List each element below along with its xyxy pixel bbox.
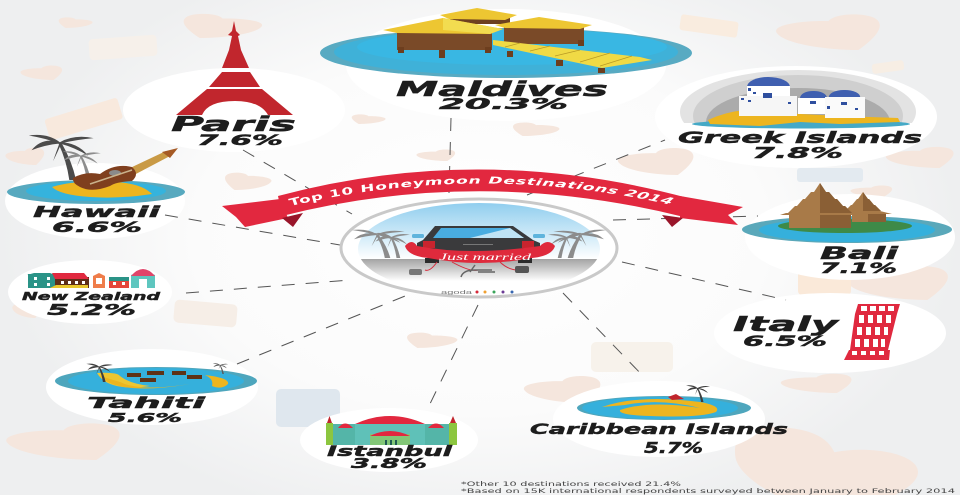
mirrors (412, 234, 424, 238)
value: 5.2% (47, 301, 136, 319)
car (417, 226, 540, 253)
icon: lagoon island (55, 363, 257, 395)
dashed connector lines (165, 118, 786, 410)
value: 7.6% (197, 133, 283, 149)
Maldives (320, 8, 692, 113)
value: 7.8% (752, 144, 843, 162)
agoda logo (441, 290, 514, 296)
central badge: just married car (340, 199, 620, 297)
footnotes (461, 480, 955, 495)
icon: water villas (320, 8, 692, 78)
Bali (742, 183, 952, 277)
icon: temples (742, 183, 952, 243)
icon: eiffel tower (176, 21, 293, 115)
icon: mosque (326, 416, 457, 445)
Greek Islands (678, 70, 922, 162)
icon: island with ukulele (7, 135, 185, 204)
value: 7.1% (820, 261, 897, 277)
New Zealand (22, 269, 161, 319)
label: Caribbean Islands (530, 422, 789, 438)
value: 6.5% (743, 334, 827, 350)
Hawaii (7, 135, 185, 236)
Tahiti (55, 363, 257, 425)
Istanbul (326, 416, 457, 472)
icon: colourful houses (27, 269, 155, 288)
label: Hawaii (33, 203, 161, 221)
ribbon across the car (405, 242, 555, 263)
Italy (733, 304, 900, 360)
label: Bali (820, 244, 901, 264)
label: Italy (733, 312, 840, 336)
label: New Zealand (22, 291, 161, 303)
icon: santorini houses (680, 70, 916, 128)
icon: leaning tower of pisa (844, 304, 900, 360)
background suitcases (44, 14, 905, 427)
value: 5.7% (644, 439, 703, 457)
banner title: Top 10 Honeymoon Destinations 2014 (288, 176, 674, 206)
footnotes: *Other 10 destinations received 21.4% (461, 480, 681, 488)
value: 20.3% (439, 95, 568, 113)
label: Istanbul (327, 444, 452, 460)
agoda logo: agoda (441, 290, 472, 296)
value: 5.6% (108, 410, 182, 425)
ribbon banner (222, 170, 743, 227)
cans and strings (409, 262, 529, 277)
value: 6.6% (52, 220, 142, 236)
palms (352, 230, 606, 258)
just married lettering: Just married (439, 252, 532, 262)
icon: lagoon with palm (577, 385, 751, 420)
Paris (171, 21, 296, 149)
value: 3.8% (351, 456, 427, 472)
label: Maldives (396, 77, 608, 101)
label: Greek Islands (678, 128, 922, 147)
label: Paris (171, 112, 296, 136)
label: Tahiti (87, 394, 207, 412)
footnotes: *Based on 15K international respondents surveyed between January to February 2014 (461, 487, 955, 495)
Caribbean Islands (530, 385, 789, 457)
